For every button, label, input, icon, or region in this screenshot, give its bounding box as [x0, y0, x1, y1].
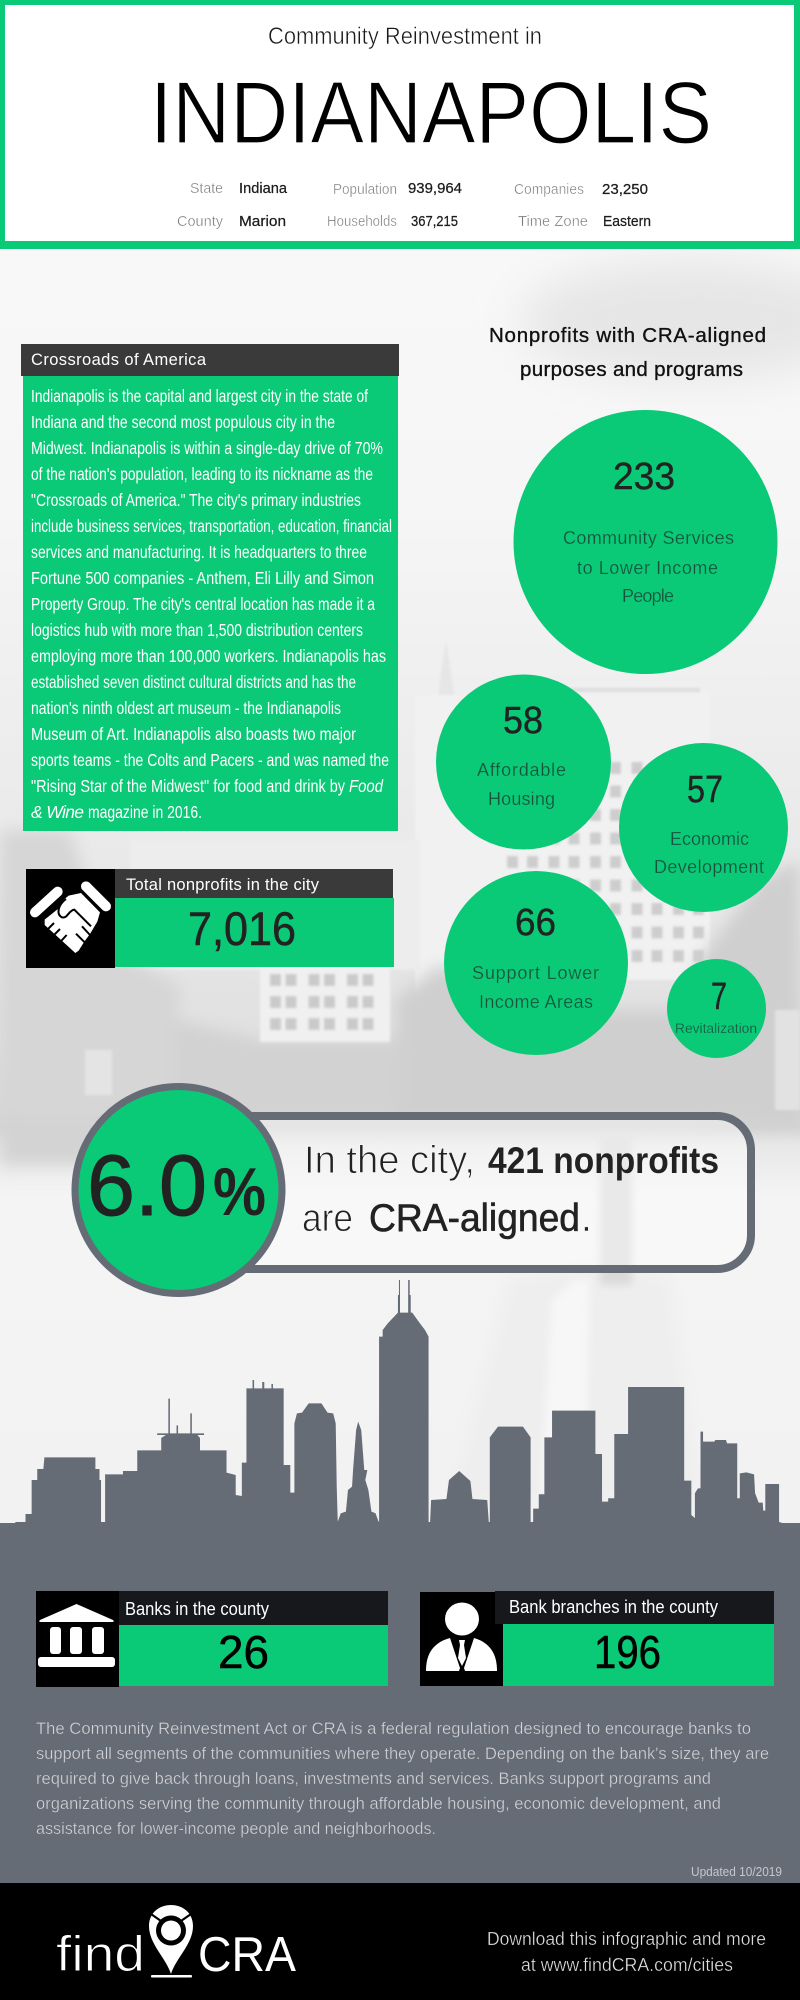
city facts table: State — [190, 180, 223, 197]
heading: nonprofits with CRA-aligned purposes: Nonprofits with CRA-aligned — [489, 324, 766, 347]
city facts table: County — [177, 213, 223, 230]
bubble: Affordable Housing — [436, 674, 611, 850]
logo: findCRA: find — [56, 1926, 145, 1982]
callout text: . — [581, 1197, 592, 1240]
panel heading text: Crossroads of America — [31, 351, 207, 369]
bubble: Revitalization: 7 — [711, 976, 727, 1018]
panel body text: Midwest. Indianapolis is within a single-day drive of 70% — [31, 438, 383, 458]
bubble: Affordable Housing: Housing — [488, 789, 555, 809]
download note: at www.findCRA.com/cities — [521, 1954, 733, 1975]
percent value: 6.0 — [87, 1138, 207, 1234]
city facts table: Population — [333, 181, 397, 198]
city facts table: Marion — [239, 213, 286, 230]
label text: Banks in the county — [125, 1599, 269, 1619]
bubble: Community Services: 233 — [613, 456, 675, 498]
panel body text: include business services, transportation, education, financial — [31, 516, 392, 536]
panel body text: services and manufacturing. It is headquarters to three — [31, 542, 367, 562]
stat: banks in the county — [36, 1591, 388, 1687]
bubble: Affordable Housing: Affordable — [477, 760, 566, 780]
bubble: Support Lower Income Areas: Support Lower — [472, 963, 599, 983]
panel body text: employing more than 100,000 workers. Indianapolis has — [31, 646, 386, 666]
value background — [119, 1625, 388, 1686]
city facts table: 367,215 — [411, 213, 458, 230]
bubble: Community Services: to Lower Income — [577, 558, 718, 578]
bubble: Community Services: People — [622, 586, 674, 606]
stat: total nonprofits in the city — [26, 869, 394, 968]
skyline silhouette — [0, 1280, 800, 1540]
bubble: Revitalization: Revitalization — [675, 1020, 757, 1036]
bubble: Affordable Housing: 58 — [503, 700, 543, 742]
city facts table: Indiana — [239, 180, 288, 197]
text block: about the CRA: support all segments of the communities where they operate. Depending on the bank's size, they are — [36, 1744, 769, 1763]
bubble: Economic Development: Economic — [670, 829, 749, 849]
callout text: are — [302, 1197, 353, 1240]
city facts table: Companies — [514, 181, 584, 198]
panel body text: Museum of Art. Indianapolis also boasts two major — [31, 724, 356, 744]
label bar — [115, 869, 393, 898]
panel body text: established seven distinct cultural districts and has the — [31, 672, 356, 692]
logo: findCRA — [56, 1905, 296, 1982]
bubble: Revitalization — [667, 959, 766, 1058]
panel body text: & Wine — [31, 802, 84, 822]
text block: about the CRA: The Community Reinvestment Act or CRA is a federal regulation designed to encourage banks to — [36, 1719, 751, 1738]
panel heading bar — [21, 344, 399, 376]
callout text: 421 nonprofits — [488, 1140, 719, 1181]
panel body text: "Rising Star of the Midwest" for food and drink by — [31, 776, 345, 796]
panel body text: sports teams - the Colts and Pacers - and was named the — [31, 750, 389, 770]
footer panel — [0, 1883, 800, 2000]
header panel — [0, 0, 800, 249]
icon: business person — [426, 1602, 497, 1671]
value background — [115, 898, 394, 967]
panel body text — [31, 386, 392, 822]
bubble: Support Lower Income Areas — [444, 871, 628, 1055]
panel body text: Indianapolis is the capital and largest city in the state of — [31, 386, 368, 406]
panel body text: nation's ninth oldest art museum - the Indianapolis — [31, 698, 341, 718]
panel: Crossroads of America — [21, 344, 399, 831]
city facts table: 23,250 — [602, 181, 648, 198]
callout text — [302, 1139, 719, 1240]
label text: Total nonprofits in the city — [126, 876, 320, 894]
logo: findCRA: CRA — [198, 1928, 296, 1982]
bubble: Economic Development — [619, 743, 788, 912]
header subtitle: Community Reinvestment in — [268, 23, 542, 50]
percent sign: % — [213, 1154, 266, 1230]
panel body text: Fortune 500 companies - Anthem, Eli Lilly and Simon — [31, 568, 374, 588]
value: 26 — [218, 1626, 269, 1678]
city facts table: 939,964 — [408, 180, 462, 197]
panel body text: logistics hub with more than 1,500 distribution centers — [31, 620, 363, 640]
panel body text: "Crossroads of America." The city's primary industries — [31, 490, 361, 510]
heading: nonprofits with CRA-aligned purposes — [489, 324, 766, 381]
heading: nonprofits with CRA-aligned purposes: purposes and programs — [520, 358, 743, 381]
percent circle — [75, 1086, 282, 1294]
label bar — [495, 1591, 774, 1624]
icon: handshake — [35, 886, 106, 953]
lower panel background — [0, 1523, 800, 1883]
icon: location pin — [149, 1905, 193, 1978]
text block: about the CRA — [36, 1719, 769, 1838]
bubble: Support Lower Income Areas: 66 — [515, 902, 556, 944]
callout text: In the city, — [304, 1139, 475, 1182]
callout frame — [150, 1116, 751, 1269]
callout: CRA-aligned share — [75, 1086, 751, 1294]
value: 196 — [594, 1626, 661, 1678]
text block: about the CRA: assistance for lower-income people and neighborhoods. — [36, 1819, 436, 1838]
callout text: CRA-aligned — [369, 1197, 580, 1240]
label bar — [119, 1591, 388, 1625]
city facts table: Households — [327, 213, 397, 230]
bubble: Economic Development: Development — [654, 857, 764, 877]
download note: Download this infographic and more — [487, 1928, 766, 1949]
icon: bank building — [38, 1604, 115, 1667]
bubble: Community Services: Community Services — [563, 528, 734, 548]
city facts table: Time Zone — [518, 213, 588, 230]
panel body text: Indiana and the second most populous city in the — [31, 412, 335, 432]
updated date: Updated 10/2019 — [691, 1865, 782, 1879]
panel background — [23, 376, 398, 831]
city facts table — [177, 180, 651, 230]
background: faded city photograph — [0, 249, 800, 1539]
panel body text: of the nation's population, leading to its nickname as the — [31, 464, 373, 484]
bubble: Community Services — [514, 410, 778, 674]
bubble: Support Lower Income Areas: Income Areas — [479, 992, 593, 1012]
bubble: Economic Development: 57 — [687, 769, 723, 811]
panel body text: Property Group. The city's central location has made it a — [31, 594, 375, 614]
text block: about the CRA: required to give back through loans, investments and services. Banks support programs and — [36, 1769, 711, 1788]
text block: about the CRA: organizations serving the community through affordable housing, economic development, and — [36, 1794, 721, 1813]
value background — [503, 1624, 774, 1686]
stat: bank branches in the county — [420, 1591, 774, 1686]
value: 7,016 — [188, 902, 296, 955]
city title: INDIANAPOLIS — [150, 63, 712, 162]
download note — [487, 1928, 766, 1975]
panel body text: Food — [349, 776, 384, 796]
panel body text: magazine in 2016. — [88, 802, 202, 822]
label text: Bank branches in the county — [509, 1597, 718, 1617]
city facts table: Eastern — [603, 213, 651, 230]
